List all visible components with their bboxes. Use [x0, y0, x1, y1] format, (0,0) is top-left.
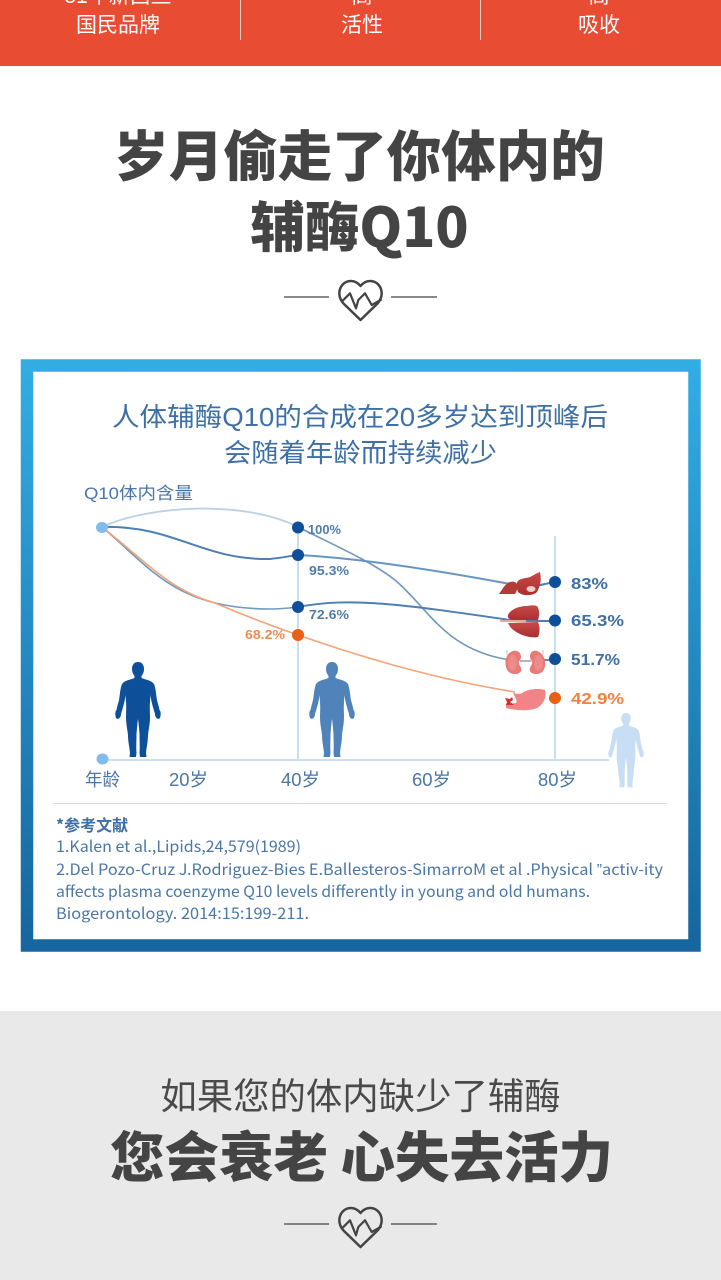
- start dots: [96, 522, 108, 764]
- curve: 72.6% to 65.3%: [102, 527, 555, 621]
- references: 2.Del Pozo-Cruz J.Rodriguez-Bies E.Ballesteros-SimarroM et al .Physical ”activ-ity: [56, 858, 663, 880]
- data labels at 80 years: 83%: [571, 576, 608, 593]
- bottom subheading: 如果您的体内缺少了辅酶: [160, 1076, 561, 1117]
- icon: pale body at 80 years: [608, 713, 644, 787]
- data labels at 40 years: 68.2%: [245, 627, 285, 642]
- icon: mid body at 40 years: [309, 662, 355, 757]
- references: [53, 804, 667, 924]
- icon: kidneys: [505, 650, 545, 674]
- x axis labels: 60岁: [412, 770, 451, 790]
- y axis label: Q10体内含量: [84, 484, 193, 503]
- data points at 40 years: [292, 522, 304, 641]
- chart title: 会随着年龄而持续减少: [224, 438, 497, 468]
- main heading: 辅酶Q10: [250, 184, 469, 262]
- data labels at 80 years: 42.9%: [571, 691, 624, 708]
- references: 1.Kalen et al.,Lipids,24,579(1989): [56, 835, 301, 857]
- curve: 68.2% to 42.9%: [102, 527, 515, 692]
- banner item: national brand: [64, 0, 172, 37]
- icon: heartbeat divider bottom: [284, 1206, 437, 1248]
- data labels at 40 years: 72.6%: [309, 607, 349, 622]
- x axis labels: 40岁: [281, 770, 320, 790]
- chart title: 人体辅酶Q10的合成在20多岁达到顶峰后: [112, 402, 608, 432]
- chart title: [112, 402, 608, 468]
- banner item: national brand: 国民品牌: [76, 14, 160, 37]
- icon: stomach: [505, 689, 546, 710]
- panel: Q10 decline chart: [20, 359, 701, 952]
- references: *参考文献: [56, 812, 128, 836]
- x axis labels: 80岁: [538, 770, 577, 790]
- banner item: high activity: [341, 0, 383, 37]
- banner item: high absorption: 吸收: [578, 14, 620, 37]
- banner divider right: [480, 0, 481, 40]
- panel: bottom gray section: [0, 1011, 721, 1280]
- data points at 80 years: [549, 576, 561, 704]
- x axis labels: [85, 770, 577, 790]
- x axis labels: 20岁: [169, 770, 208, 790]
- references: Biogerontology. 2014:15:199-211.: [56, 902, 309, 924]
- icon: dark body at 20 years: [115, 662, 161, 757]
- data labels at 80 years: 65.3%: [571, 613, 624, 630]
- data labels at 40 years: 95.3%: [309, 563, 349, 578]
- data labels at 40 years: 100%: [308, 522, 341, 537]
- main heading: 岁月偷走了你体内的: [114, 113, 605, 192]
- panel frame: [27, 366, 694, 946]
- curve: 95.3% to 83%: [102, 527, 555, 586]
- curve: heart 100% to 51.7%: [102, 509, 555, 660]
- axes and guide lines: [102, 527, 609, 760]
- icon: lungs: [500, 605, 555, 637]
- data labels at 80 years: [571, 576, 624, 708]
- banner divider left: [240, 0, 241, 40]
- data labels at 40 years: [245, 522, 349, 642]
- bottom heading: 您会衰老 心失去活力: [110, 1114, 613, 1193]
- main heading: [114, 113, 605, 262]
- icon: liver: [499, 572, 541, 595]
- icon: heartbeat divider top: [284, 280, 437, 322]
- references: affects plasma coenzyme Q10 levels differently in young and old humans.: [56, 880, 590, 902]
- x axis labels: 年龄: [85, 770, 120, 790]
- banner item: high activity: 活性: [341, 14, 383, 37]
- top red banner: [0, 0, 721, 66]
- data labels at 80 years: 51.7%: [571, 652, 620, 669]
- banner item: high absorption: [578, 0, 620, 37]
